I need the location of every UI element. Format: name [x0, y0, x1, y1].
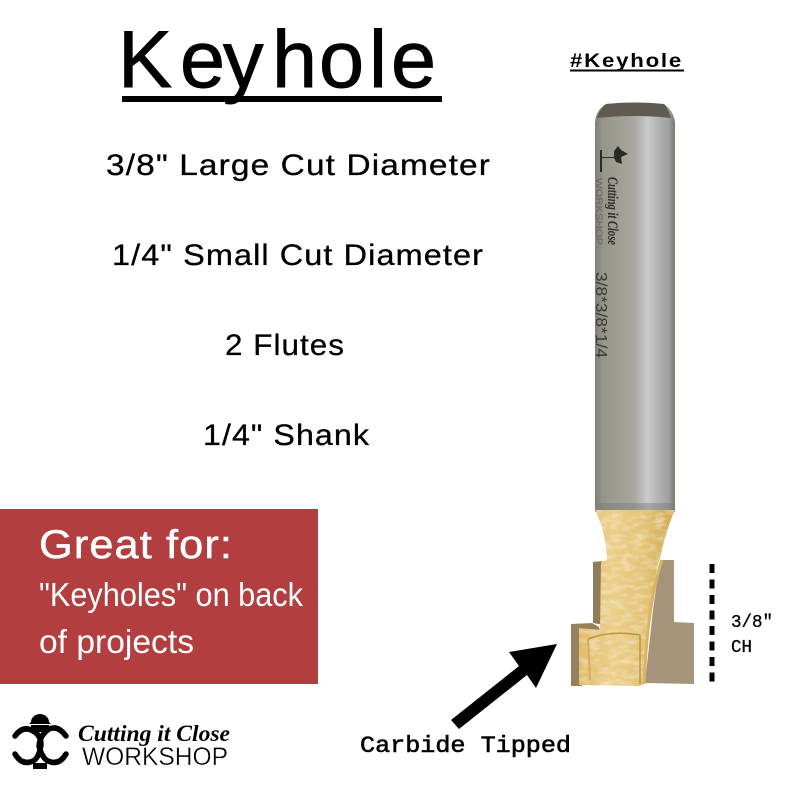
spec: small cut diameter: 1/4" Small Cut Diameter	[112, 239, 484, 272]
dimension marker: CH	[731, 638, 752, 658]
label: carbide tipped: Carbide Tipped	[360, 733, 571, 759]
logo	[15, 714, 230, 771]
shank engraving: 3/8*3/8*1/4	[592, 272, 609, 358]
logo mark	[15, 714, 66, 769]
dimension label: 3/8"	[731, 613, 773, 633]
hashtag label: #Keyhole	[570, 51, 683, 72]
panel text	[39, 576, 303, 660]
spec: large cut diameter: 3/8" Large Cut Diameter	[106, 149, 491, 182]
shank	[592, 102, 675, 512]
dimension marker	[712, 564, 773, 685]
spec list	[106, 149, 491, 452]
title: Keyhole	[118, 15, 436, 105]
shank engraving: WORKSHOP	[594, 178, 604, 245]
spec: flutes: 2 Flutes	[225, 329, 345, 362]
gold flute details	[588, 560, 662, 684]
shank engraving: Cutting it Close	[604, 177, 620, 245]
router bit photo	[571, 102, 694, 686]
arrow: carbide tipped	[451, 644, 557, 729]
gold body	[579, 510, 675, 686]
panel text: "Keyholes" on back	[39, 576, 303, 613]
logo wordmark: Cutting it Close	[78, 721, 230, 746]
carbide wings	[571, 560, 694, 686]
panel: great for	[0, 509, 318, 684]
spec: shank: 1/4" Shank	[203, 419, 370, 452]
shank engraving	[592, 146, 628, 358]
logo: WORKSHOP	[82, 743, 228, 771]
panel text: of projects	[39, 623, 194, 660]
panel heading: Great for:	[39, 523, 233, 567]
